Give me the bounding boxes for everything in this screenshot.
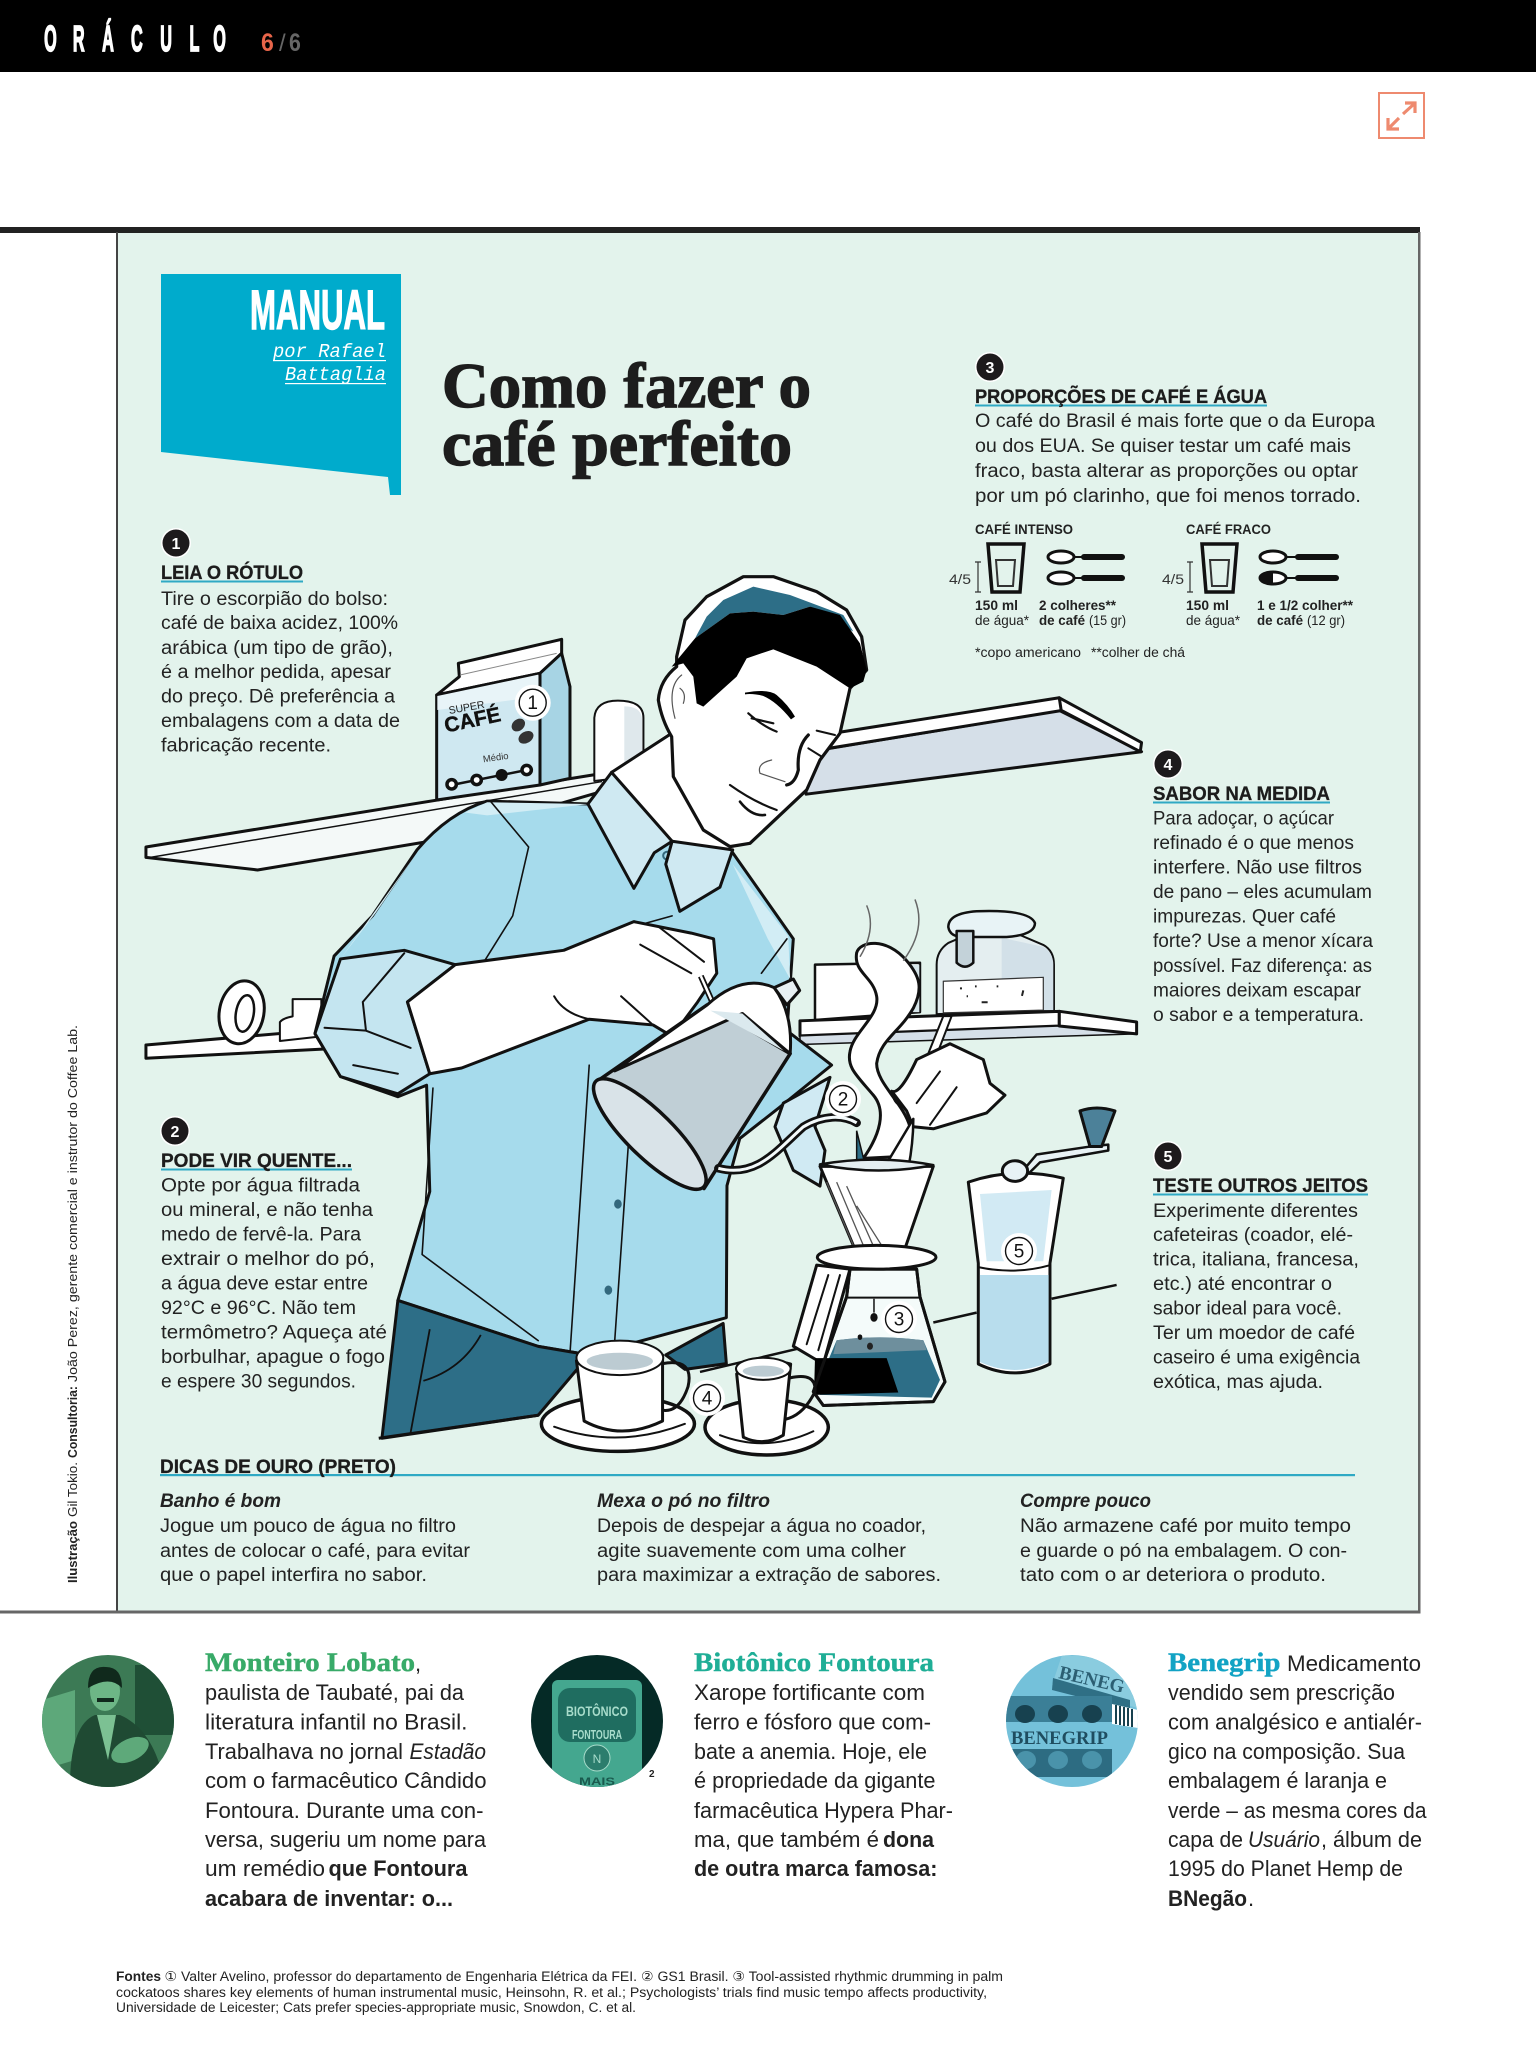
chart: café intenso proportions: de água*	[975, 613, 1030, 628]
tip: banho é bom: Jogue um pouco de água no filtro	[160, 1516, 456, 1537]
footnote: cup and spoon: *copo americano	[975, 645, 1081, 660]
coffee bag: CAFÉ	[442, 703, 503, 738]
badge: step 5 on grinder	[1001, 1233, 1037, 1269]
kettle	[578, 976, 800, 1202]
text: Monteiro Lobato: que Fontoura	[328, 1856, 468, 1881]
text: Benegrip: embalagem é laranja e	[1168, 1768, 1387, 1793]
chart: café fraco proportions: de café	[1257, 613, 1303, 628]
step 5: teste outros jeitos: TESTE OUTROS JEITOS	[1153, 1175, 1368, 1197]
photo: Monteiro Lobato	[42, 1655, 174, 1787]
badge: step 4 between cups	[689, 1380, 725, 1416]
text: Benegrip: gico na composição. Sua	[1168, 1739, 1406, 1764]
badge: step 2 on kettle spout: 2	[838, 1090, 848, 1110]
barista head	[658, 577, 867, 847]
step 4: sabor na medida: Para adoçar, o açúcar	[1153, 808, 1335, 830]
step 2: pode vir quente: PODE VIR QUENTE...	[161, 1150, 352, 1172]
badge: step 5 on grinder: 5	[1014, 1242, 1024, 1262]
top header bar: 6	[289, 28, 301, 56]
illustration: barista pouring coffee	[146, 577, 1142, 1455]
photo: Biotônico Fontoura bottle: MAIS	[579, 1776, 615, 1788]
step 1: leia o rótulo: Tire o escorpião do bolso:	[161, 589, 388, 610]
step 4: sabor na medida: forte? Use a menor xícara	[1153, 931, 1373, 952]
step 2: pode vir quente: borbulhar, apague o fogo	[161, 1347, 385, 1368]
top header bar: 6	[261, 29, 274, 57]
tip: compre pouco: Compre pouco	[1020, 1491, 1151, 1512]
credits: vertical	[65, 1025, 80, 1583]
step 2: pode vir quente: medo de fervê-la. Para	[161, 1224, 361, 1246]
tip: compre pouco: tato com o ar deteriora o produto.	[1020, 1565, 1326, 1586]
step 5: teste outros jeitos: Experimente diferentes	[1153, 1201, 1358, 1222]
coffee bag: SUPER	[448, 700, 486, 717]
shelves and objects behind barista	[146, 698, 1142, 1058]
text: Benegrip: Benegrip	[1168, 1648, 1280, 1677]
step 3: proporções de café e água: ou dos EUA. Se quiser testar um café mais	[975, 436, 1351, 457]
shelf right with box and jar	[800, 911, 1137, 1045]
tip: compre pouco	[1020, 1491, 1351, 1586]
dripper, carafe, grinder and cups	[700, 899, 1117, 1455]
step 2: pode vir quente: extrair o melhor do pó,	[161, 1249, 375, 1270]
tip: compre pouco: e guarde o pó na embalagem. O con-	[1020, 1541, 1347, 1562]
tip: banho é bom: antes de colocar o café, para evitar	[160, 1541, 471, 1562]
tip: mexa o pó no filtro	[597, 1491, 941, 1586]
step 1: leia o rótulo: arábica (um tipo de grão),	[161, 638, 393, 659]
credits: vertical: Consultoria:	[65, 1386, 80, 1458]
text: Benegrip: vendido sem prescrição	[1168, 1680, 1395, 1705]
tip: mexa o pó no filtro: Mexa o pó no filtro	[597, 1491, 770, 1512]
step 5: teste outros jeitos: sabor ideal para você.	[1153, 1298, 1342, 1320]
text: Monteiro Lobato: acabara de inventar: o...	[205, 1886, 453, 1911]
step 2: pode vir quente: termômetro? Aqueça até	[161, 1322, 387, 1344]
step 3: proporções de café e água: PROPORÇÕES DE CAFÉ E ÁGUA	[975, 384, 1267, 408]
chart: café fraco proportions	[1162, 522, 1354, 628]
text: Monteiro Lobato: ,	[415, 1651, 421, 1676]
step 1: leia o rótulo: do preço. Dê preferência a	[161, 686, 395, 708]
step 4: sabor na medida: SABOR NA MEDIDA	[1153, 783, 1330, 805]
text: Biotônico Fontoura: de outra marca famosa:	[694, 1856, 938, 1881]
sources footnote: ① Valter Avelino, professor do departamento de Engenharia Elétrica da FEI. ② GS1 Brasil. ③ Tool-assisted rhythmic drumming in palm	[164, 1969, 1003, 1984]
step 3: proporções de café e água: O café do Brasil é mais forte que o da Europa	[975, 411, 1375, 432]
step 4: sabor na medida: 4	[1164, 757, 1173, 774]
section tag: manual	[161, 274, 401, 495]
footnote: cup and spoon	[975, 645, 1186, 660]
step 4: sabor na medida: interfere. Não use filtros	[1153, 858, 1362, 878]
chart: café intenso proportions: 150 ml	[975, 598, 1018, 613]
step 2: pode vir quente: ou mineral, e não tenha	[161, 1200, 373, 1221]
step 4: sabor na medida: maiores deixam escapar	[1153, 980, 1362, 1002]
step 5: teste outros jeitos: trica, italiana, francesa,	[1153, 1250, 1359, 1270]
step 2: pode vir quente: Opte por água filtrada	[161, 1176, 360, 1196]
step 4: sabor na medida: impurezas. Quer café	[1153, 906, 1336, 928]
step 1: leia o rótulo	[161, 528, 400, 756]
coffee bag	[437, 639, 570, 800]
photo: Biotônico Fontoura bottle: FONTOURA	[572, 1727, 622, 1742]
credits: vertical: Gil Tokio.	[65, 1462, 80, 1517]
title: café perfeito	[442, 408, 792, 479]
text: Monteiro Lobato: um remédio	[205, 1856, 325, 1881]
chart: café fraco proportions: 150 ml	[1186, 598, 1229, 613]
text: Monteiro Lobato: Fontoura. Durante uma con-	[205, 1798, 484, 1823]
chart: café fraco proportions: CAFÉ FRACO	[1186, 522, 1271, 537]
step 5: teste outros jeitos: Ter um moedor de café	[1153, 1323, 1355, 1344]
step 1: leia o rótulo: é a melhor pedida, apesar	[161, 662, 392, 683]
tips heading: DICAS DE OURO (PRETO)	[160, 1456, 396, 1478]
text: Biotônico Fontoura: bate a anemia. Hoje, ele	[694, 1739, 927, 1764]
badge: step 2 on kettle spout	[825, 1081, 861, 1117]
step 3: proporções de café e água: por um pó clarinho, que foi menos torrado.	[975, 486, 1361, 507]
step 4: sabor na medida: o sabor e a temperatura.	[1153, 1005, 1364, 1026]
text: Biotônico Fontoura: dona	[883, 1827, 935, 1852]
text: Monteiro Lobato: Estadão	[410, 1739, 486, 1764]
photo credit number: 2	[649, 1769, 655, 1780]
step 4: sabor na medida: refinado é o que menos	[1153, 833, 1354, 854]
photo: Benegrip pack	[1006, 1655, 1138, 1787]
step 1: leia o rótulo: café de baixa acidez, 100%	[161, 613, 398, 634]
sources footnote: cockatoos shares key elements of human instrumental music, Heinsohn, R. et al.; Psychologists’ trials find music tempo affects productivity,	[116, 1985, 987, 2000]
chart: café intenso proportions: (15 gr)	[1089, 613, 1126, 628]
photo: Biotônico Fontoura bottle: BIOTÔNICO	[566, 1702, 628, 1719]
barista body and arm	[315, 801, 832, 1438]
text: Biotônico Fontoura: ferro e fósforo que com-	[694, 1710, 931, 1734]
step 1: leia o rótulo: embalagens com a data de	[161, 711, 400, 732]
chart: café intenso proportions: de café	[1039, 613, 1085, 628]
title	[442, 350, 811, 479]
text: Benegrip: BNegão	[1168, 1886, 1247, 1911]
text: Monteiro Lobato: paulista de Taubaté, pai da	[205, 1680, 465, 1705]
text: Monteiro Lobato: com o farmacêutico Cândido	[205, 1768, 486, 1793]
text: Biotônico Fontoura	[694, 1648, 953, 1881]
text: Benegrip: Medicamento	[1287, 1651, 1421, 1676]
text: Benegrip: , álbum de	[1321, 1827, 1422, 1852]
tip: mexa o pó no filtro: agite suavemente com uma colher	[597, 1541, 907, 1562]
tip: banho é bom	[160, 1491, 471, 1586]
neck and collar	[588, 732, 742, 911]
chart: café fraco proportions: de água*	[1186, 613, 1241, 628]
badge: step 4 between cups: 4	[702, 1388, 713, 1410]
step 3: proporções de café e água: 3	[986, 360, 995, 377]
step 5: teste outros jeitos: etc.) até encontrar o	[1153, 1274, 1332, 1295]
title: Como fazer o	[442, 350, 811, 421]
step 1: leia o rótulo: LEIA O RÓTULO	[161, 560, 303, 584]
credits: vertical: João Perez, gerente comercial e instrutor do Coffee Lab.	[65, 1025, 80, 1382]
section tag: manual: Battaglia	[285, 364, 386, 386]
credits: vertical: Ilustração	[65, 1521, 80, 1583]
text: Benegrip: 1995 do Planet Hemp de	[1168, 1856, 1403, 1881]
step 5: teste outros jeitos: 5	[1164, 1149, 1173, 1166]
chart: café fraco proportions: (12 gr)	[1307, 613, 1345, 628]
text: Biotônico Fontoura: Xarope fortificante com	[694, 1680, 925, 1705]
section tag: manual: MANUAL	[250, 278, 385, 341]
step 5: teste outros jeitos: cafeteiras (coador, elé-	[1153, 1225, 1353, 1246]
step 2: pode vir quente: 2	[171, 1124, 180, 1141]
step 5: teste outros jeitos	[1153, 1141, 1368, 1393]
tip: mexa o pó no filtro: Depois de despejar a água no coador,	[597, 1516, 926, 1537]
chart: café fraco proportions: 4/5	[1162, 571, 1184, 587]
tip: banho é bom: que o papel interfira no sabor.	[160, 1565, 427, 1586]
photo: Benegrip pack: BENEG	[1057, 1662, 1127, 1698]
text: Biotônico Fontoura: ma, que também é	[694, 1827, 879, 1852]
chart: café intenso proportions	[949, 522, 1126, 628]
footnote: cup and spoon: **colher de chá	[1091, 645, 1186, 660]
step 3: proporções de café e água	[975, 352, 1375, 507]
badge: step 3 on carafe	[881, 1301, 917, 1337]
section tag: manual: por Rafael	[272, 341, 386, 363]
chart: café intenso proportions: CAFÉ INTENSO	[975, 522, 1073, 537]
text: Benegrip: .	[1248, 1886, 1254, 1911]
top header bar: ORÁCULO	[44, 19, 226, 59]
text: Benegrip: verde – as mesma cores da	[1168, 1798, 1427, 1823]
step 2: pode vir quente: e espere 30 segundos.	[161, 1372, 356, 1392]
top header bar	[0, 0, 1536, 72]
chart: café fraco proportions: 1 e 1/2 colher**	[1257, 598, 1354, 613]
step 3: proporções de café e água: fraco, basta alterar as proporções ou optar	[975, 461, 1359, 482]
text: Benegrip: capa de	[1168, 1827, 1243, 1852]
text: Benegrip: com analgésico e antialér-	[1168, 1710, 1422, 1734]
coffee bag: Médio	[482, 751, 509, 765]
step 2: pode vir quente	[160, 1116, 387, 1392]
badge: step 1 on bag: 1	[527, 693, 538, 714]
text: Biotônico Fontoura: é propriedade da gigante	[694, 1768, 936, 1793]
step 4: sabor na medida	[1153, 749, 1373, 1026]
text: Biotônico Fontoura: farmacêutica Hypera Phar-	[694, 1798, 953, 1823]
text: Monteiro Lobato: versa, sugeriu um nome para	[205, 1827, 487, 1852]
badge: step 1 on bag	[515, 685, 551, 721]
text: Monteiro Lobato: literatura infantil no Brasil.	[205, 1710, 468, 1734]
photo: Biotônico Fontoura bottle	[531, 1655, 663, 1790]
sources footnote	[116, 1969, 1003, 2015]
sources footnote: Universidade de Leicester; Cats prefer species-appropriate music, Snowdon, C. et al.	[116, 2000, 636, 2015]
chart: café intenso proportions: 4/5	[949, 571, 971, 587]
text: Monteiro Lobato	[205, 1648, 487, 1911]
step 5: teste outros jeitos: caseiro é uma exigência	[1153, 1348, 1360, 1368]
tip: compre pouco: Não armazene café por muito tempo	[1020, 1516, 1351, 1537]
step 2: pode vir quente: 92°C e 96°C. Não tem	[161, 1298, 356, 1319]
badge: step 3 on carafe: 3	[894, 1310, 904, 1330]
step 2: pode vir quente: a água deve estar entre	[161, 1274, 368, 1294]
tip: mexa o pó no filtro: para maximizar a extração de sabores.	[597, 1565, 941, 1586]
step 1: leia o rótulo: 1	[172, 536, 181, 553]
step 1: leia o rótulo: fabricação recente.	[161, 736, 331, 756]
text: Biotônico Fontoura: Biotônico Fontoura	[694, 1648, 934, 1677]
chart: café intenso proportions: 2 colheres**	[1039, 598, 1117, 613]
big cup	[541, 1341, 694, 1451]
tip: banho é bom: Banho é bom	[160, 1491, 281, 1512]
step 5: teste outros jeitos: exótica, mas ajuda.	[1153, 1372, 1323, 1393]
photo: Biotônico Fontoura bottle: N	[593, 1752, 601, 1766]
text: Monteiro Lobato: Monteiro Lobato	[205, 1648, 415, 1677]
panel: coffee manual background	[0, 227, 1420, 1614]
text: Benegrip: Usuário	[1248, 1827, 1320, 1852]
photo: Benegrip pack: BENEGRIP	[1011, 1728, 1108, 1749]
icon: expand arrows	[1379, 93, 1424, 138]
step 4: sabor na medida: de pano – eles acumulam	[1153, 882, 1372, 903]
top header bar: /	[279, 30, 286, 57]
sources footnote: Fontes	[116, 1969, 161, 1984]
text: Monteiro Lobato: Trabalhava no jornal	[205, 1739, 403, 1764]
step 4: sabor na medida: possível. Faz diferença: as	[1153, 956, 1372, 977]
text: Benegrip	[1168, 1648, 1427, 1911]
